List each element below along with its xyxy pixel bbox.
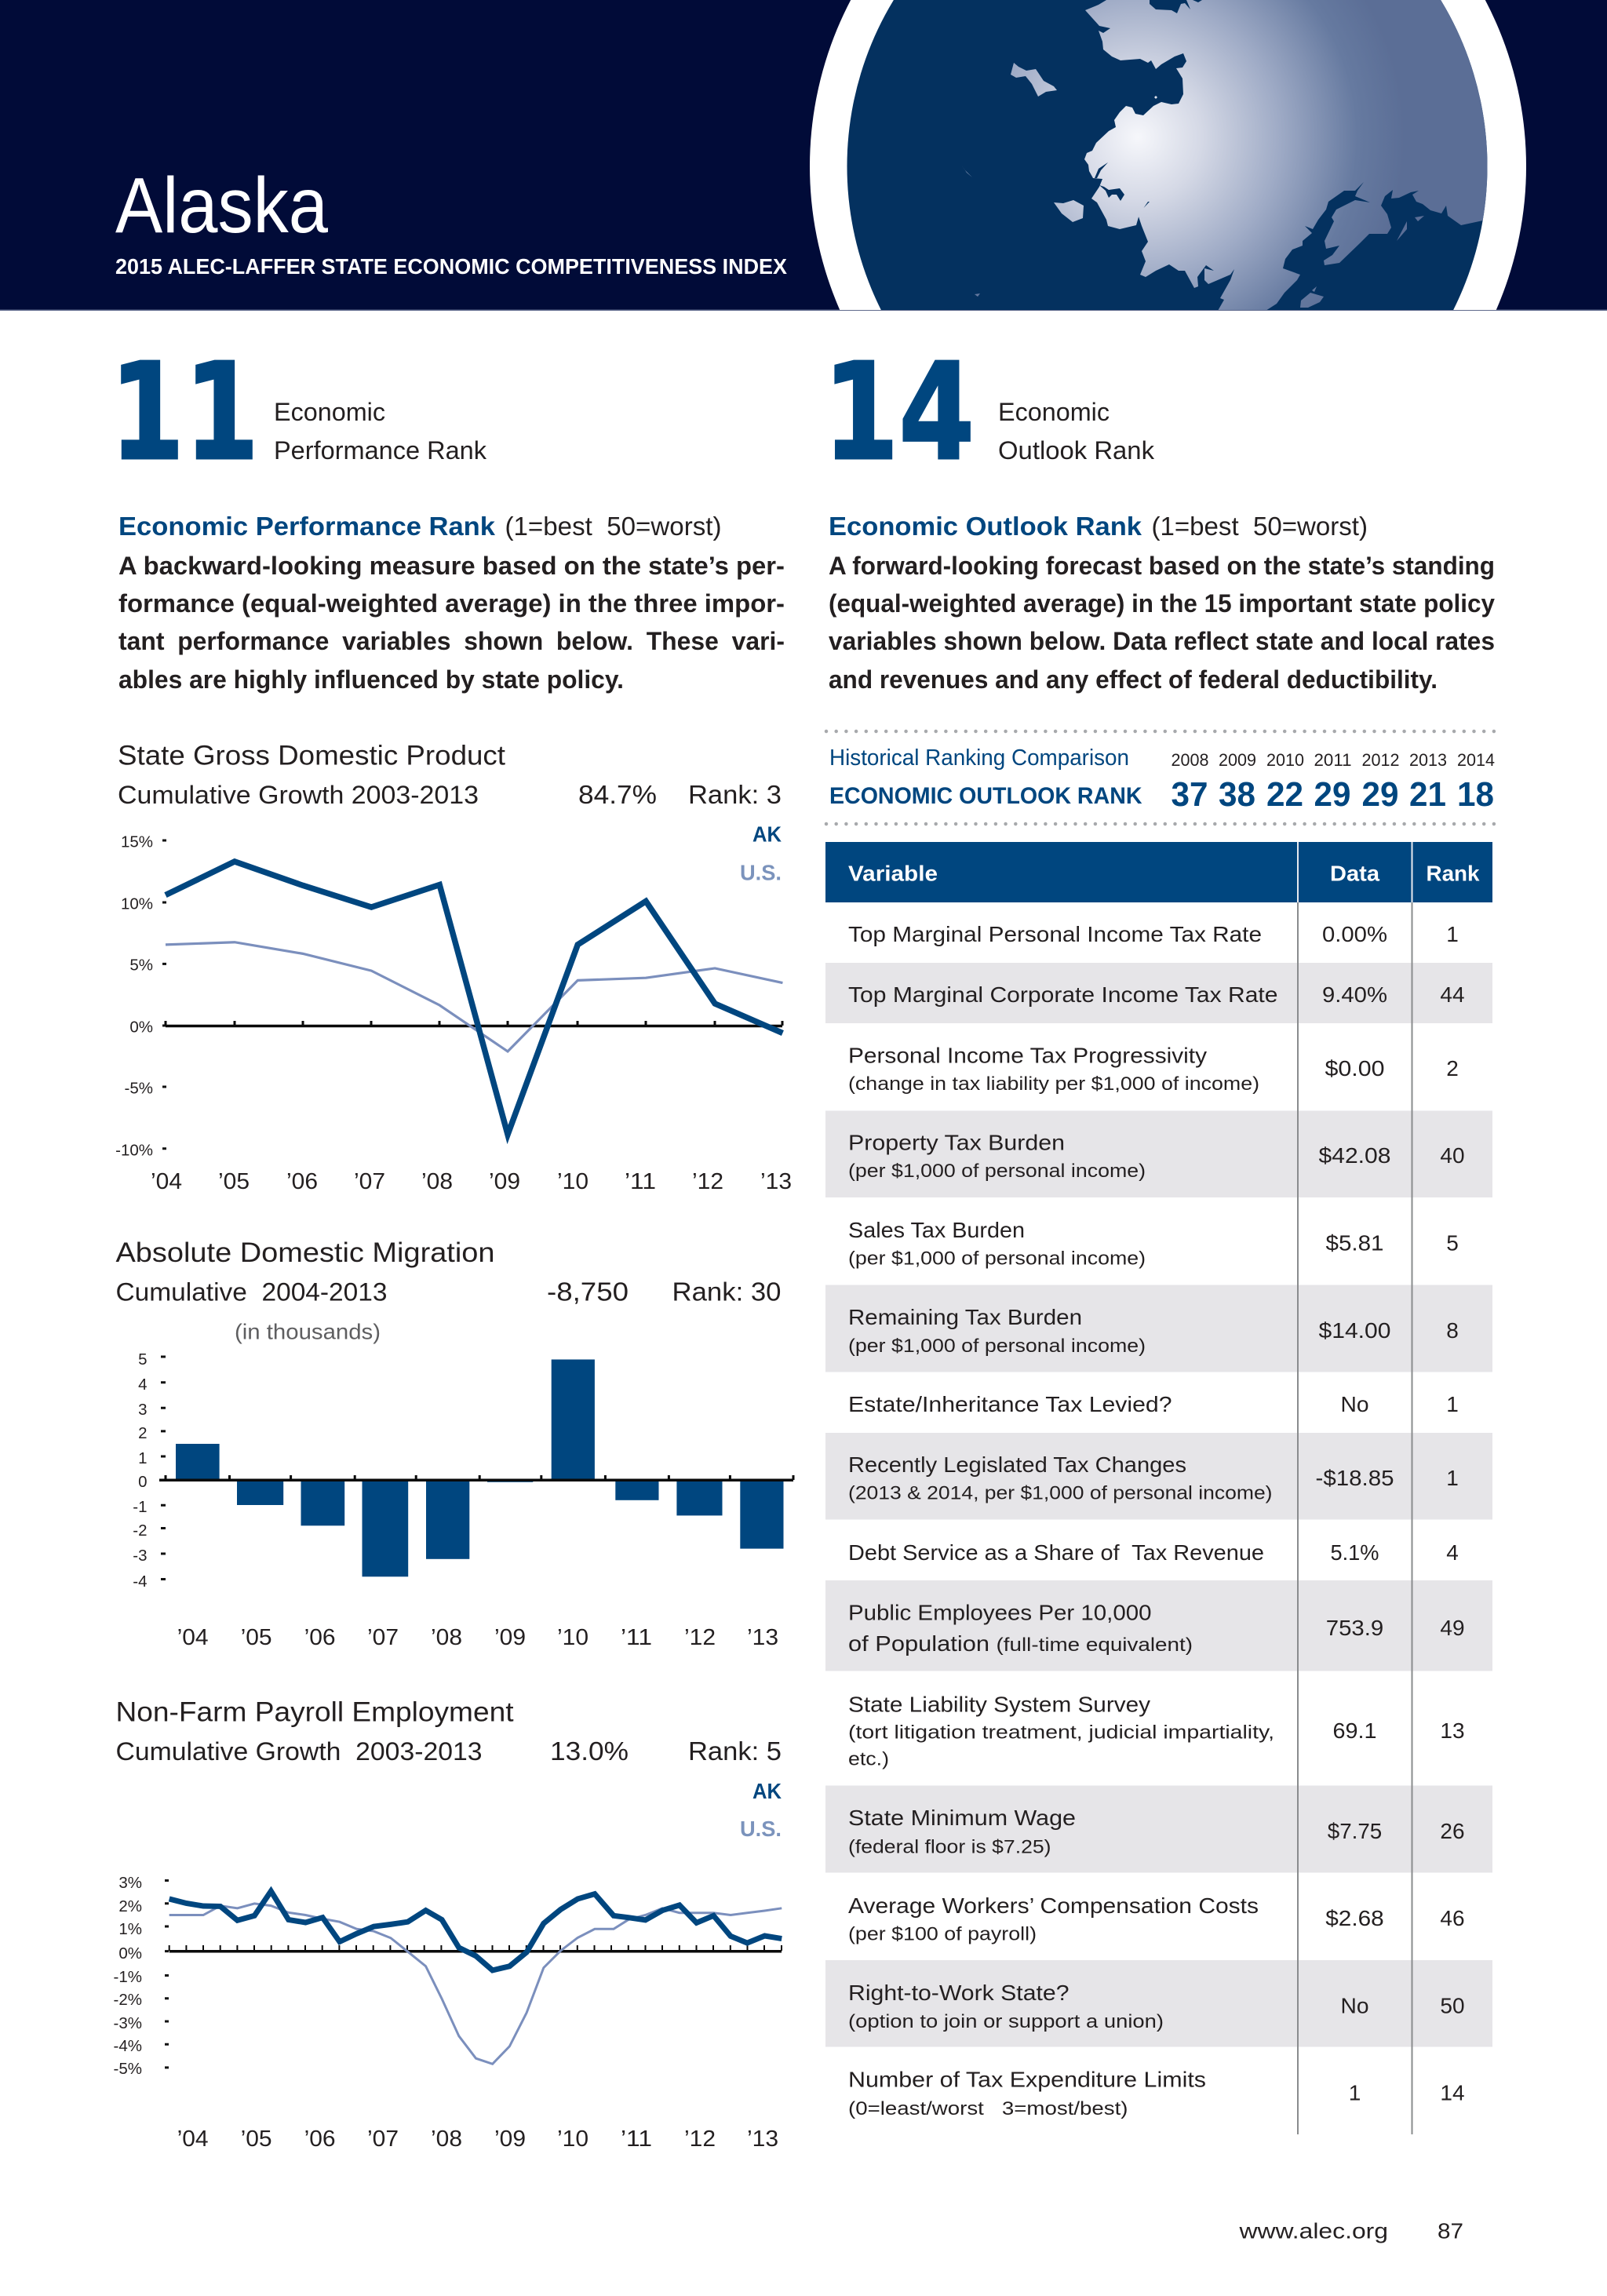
line: AK (169, 1891, 782, 1970)
chart heading: Rank: 5 (688, 1737, 782, 1766)
row: right-to-work state: (option to join or support a union) (848, 2011, 1164, 2032)
row: state liability system survey: 13 (1440, 1718, 1465, 1743)
row: estate or inheritance tax levied (848, 1392, 1459, 1416)
y axis labels and ticks: -2% (114, 1991, 142, 2009)
row: right-to-work state: 50 (1440, 1993, 1465, 2018)
row: estate or inheritance tax levied: Estate/Inheritance Tax Levied? (848, 1392, 1172, 1416)
table header: Variable (848, 862, 938, 885)
chart heading: Cumulative 2004-2013 (116, 1277, 388, 1306)
historical rank values: 18 (1457, 775, 1494, 814)
row: estate or inheritance tax levied: 1 (1446, 1392, 1459, 1416)
history years (1171, 750, 1495, 770)
row: number of tax expenditure limits: (0=least/worst 3=most/best) (848, 2098, 1128, 2119)
x axis (159, 1475, 793, 1650)
x axis: ’13 (760, 1169, 792, 1194)
row: top marginal personal income tax rate (848, 922, 1459, 946)
table header (825, 842, 1492, 902)
x axis: ’06 (286, 1169, 318, 1194)
row: remaining tax burden: 8 (1446, 1318, 1459, 1343)
row: sales tax burden (848, 1218, 1459, 1270)
chart heading: State Gross Domestic Product (118, 741, 505, 771)
x axis: ’12 (684, 2127, 716, 2152)
row: top marginal personal income tax rate: Top Marginal Personal Income Tax Rate (848, 922, 1262, 946)
row: public employees per 10,000 of population (848, 1601, 1465, 1656)
table header: Data (1330, 862, 1379, 885)
row: recently legislated tax changes (848, 1452, 1459, 1503)
legend (740, 1779, 782, 1841)
row: right-to-work state: No (1340, 1993, 1368, 2018)
row: estate or inheritance tax levied: No (1340, 1392, 1368, 1416)
y axis labels and ticks: -4 (133, 1573, 148, 1591)
row: state minimum wage: $7.75 (1328, 1819, 1382, 1843)
x axis (169, 1945, 782, 2152)
row: recently legislated tax changes: Recently Legislated Tax Changes (848, 1452, 1186, 1477)
chart heading: Cumulative Growth 2003-2013 (116, 1737, 482, 1766)
chart heading: Non-Farm Payroll Employment (116, 1696, 514, 1728)
panel: non-farm payroll employment chart (114, 1696, 782, 2152)
x axis: ’07 (354, 1169, 385, 1194)
chart heading: 84.7% (578, 780, 657, 809)
row: public employees per 10,000 of population: (full-time equivalent) (997, 1635, 1193, 1656)
row: remaining tax burden: Remaining Tax Burden (848, 1305, 1082, 1329)
y axis labels and ticks: -3 (133, 1547, 148, 1565)
rank caption: Performance Rank (274, 436, 487, 465)
row: state liability system survey: (tort litigation treatment, judicial impartiality, (848, 1722, 1274, 1744)
row: average workers compensation costs: (per $100 of payroll) (848, 1924, 1037, 1944)
description text: Economic Outlook Rank (829, 512, 1142, 541)
row: number of tax expenditure limits: 14 (1440, 2081, 1465, 2105)
rank caption: Outlook Rank (998, 436, 1155, 465)
line: U.S. (169, 1904, 782, 2064)
y axis labels and ticks: -2 (133, 1522, 148, 1540)
description text: tant performance variables shown below. These vari- (118, 627, 785, 655)
y axis labels and ticks: -1 (133, 1498, 148, 1516)
y axis labels and ticks: -3% (114, 2014, 142, 2032)
description text: ables are highly influenced by state policy. (118, 665, 624, 694)
description text: A backward-looking measure based on the state’s per- (118, 552, 785, 580)
chart heading: Absolute Domestic Migration (116, 1237, 494, 1268)
row: recently legislated tax changes: -$18.85 (1315, 1466, 1394, 1490)
row: top marginal corporate income tax rate (848, 982, 1465, 1007)
row: sales tax burden: 5 (1446, 1230, 1459, 1256)
history years: 2012 (1362, 750, 1400, 770)
y axis labels and ticks: -1% (114, 1968, 142, 1986)
x axis: ’11 (621, 2127, 652, 2152)
chart heading: -8,750 (547, 1277, 629, 1306)
row: right-to-work state: Right-to-Work State? (848, 1981, 1069, 2005)
y axis labels and ticks: 0% (129, 1019, 153, 1036)
row: sales tax burden: $5.81 (1326, 1230, 1384, 1256)
rank caption: Economic (274, 398, 385, 426)
row: remaining tax burden (848, 1305, 1459, 1357)
footer: www.alec.org (1238, 2219, 1388, 2243)
row: state minimum wage: 26 (1440, 1819, 1465, 1843)
description text: A forward-looking forecast based on the state’s standing (829, 552, 1495, 580)
y axis labels and ticks: 10% (121, 895, 153, 913)
row: right-to-work state (848, 1981, 1465, 2032)
chart heading (116, 1237, 782, 1343)
panel: economic outlook rank (823, 335, 1495, 694)
x axis: ’08 (431, 1625, 462, 1650)
legend: U.S. (740, 860, 782, 885)
row: number of tax expenditure limits (848, 2067, 1465, 2119)
row: remaining tax burden: (per $1,000 of personal income) (848, 1336, 1146, 1357)
row: state minimum wage: (federal floor is $7.25) (848, 1836, 1051, 1858)
row: top marginal personal income tax rate: 1 (1446, 922, 1459, 946)
table row stripes (825, 963, 1492, 2046)
x axis: ’04 (177, 1625, 209, 1650)
legend (740, 822, 782, 885)
row: recently legislated tax changes: 1 (1446, 1466, 1459, 1490)
column dividers (1298, 902, 1412, 2134)
panel: policy variables table (825, 842, 1492, 2134)
y axis labels and ticks: 0 (138, 1473, 148, 1491)
x axis (151, 1021, 792, 1194)
row: recently legislated tax changes: (2013 & 2014, per $1,000 of personal income) (848, 1483, 1273, 1503)
x axis: ’13 (747, 1625, 778, 1650)
historical rank values: 29 (1362, 775, 1398, 814)
row: property tax burden (848, 1130, 1465, 1182)
footer (1238, 2219, 1463, 2243)
row: state liability system survey: State Liability System Survey (848, 1692, 1150, 1717)
subtitle: 2015 ALEC-LAFFER STATE ECONOMIC COMPETITIVENESS INDEX (115, 254, 788, 279)
description text: (equal-weighted average) in the 15 important state policy (829, 589, 1495, 618)
row: average workers compensation costs: 46 (1440, 1906, 1465, 1930)
chart heading: Rank: 3 (688, 780, 782, 809)
y axis labels and ticks: 1 (138, 1449, 148, 1467)
row: property tax burden: (per $1,000 of personal income) (848, 1161, 1146, 1182)
x axis: ’07 (367, 2127, 399, 2152)
x axis: ’07 (367, 1625, 399, 1650)
row: average workers compensation costs (848, 1893, 1465, 1944)
x axis: ’12 (692, 1169, 723, 1194)
x axis: ’09 (489, 1169, 520, 1194)
history years: 2008 (1171, 750, 1208, 770)
x axis: ’06 (304, 1625, 336, 1650)
y axis labels and ticks: 4 (138, 1376, 148, 1394)
x axis: ’10 (557, 1169, 589, 1194)
description text (118, 512, 785, 694)
x axis: ’04 (151, 1169, 182, 1194)
historical rank values: 37 (1171, 775, 1208, 814)
description text: Economic Performance Rank (118, 512, 496, 541)
x axis: ’11 (625, 1169, 656, 1194)
header banner (0, 0, 1607, 311)
row: public employees per 10,000 of population: Public Employees Per 10,000 (848, 1601, 1152, 1624)
row: average workers compensation costs: $2.68 (1325, 1906, 1384, 1930)
row: top marginal personal income tax rate: 0.00% (1322, 922, 1387, 946)
description text: and revenues and any effect of federal deductibility. (829, 665, 1438, 694)
row: top marginal corporate income tax rate: 44 (1440, 982, 1465, 1007)
legend: AK (752, 822, 782, 846)
history years: 2013 (1409, 750, 1447, 770)
x axis: ’10 (557, 2127, 589, 2152)
row: personal income tax progressivity: $0.00 (1325, 1056, 1384, 1081)
chart heading (116, 1696, 782, 1766)
row: debt service as a share of tax revenue: Debt Service as a Share of Tax Revenue (848, 1540, 1264, 1565)
y axis labels and ticks: 1% (118, 1920, 142, 1938)
y axis labels and ticks: 5 (138, 1350, 148, 1368)
x axis: ’08 (421, 1169, 453, 1194)
historical rank values (1171, 775, 1494, 814)
row: property tax burden: Property Tax Burden (848, 1130, 1065, 1155)
row: debt service as a share of tax revenue: 5.1% (1331, 1540, 1379, 1565)
panel: historical ranking comparison (826, 731, 1495, 824)
historical rank values: 22 (1266, 775, 1303, 814)
y axis labels and ticks (133, 1350, 166, 1591)
footer: 87 (1438, 2219, 1463, 2243)
x axis: ’05 (241, 2127, 272, 2152)
row: personal income tax progressivity (848, 1044, 1459, 1095)
description text (829, 512, 1495, 694)
row: state liability system survey: 69.1 (1332, 1718, 1376, 1743)
history heading: Historical Ranking Comparison (829, 745, 1129, 771)
y axis labels and ticks: 2% (118, 1897, 142, 1915)
rank caption (998, 398, 1155, 465)
history years: 2011 (1314, 750, 1351, 770)
line: AK (166, 862, 782, 1135)
row: public employees per 10,000 of population: 49 (1440, 1616, 1465, 1640)
y axis labels and ticks: 3% (118, 1874, 142, 1892)
chart heading: 13.0% (550, 1737, 629, 1766)
x axis: ’08 (431, 2127, 462, 2152)
panel: economic performance rank (110, 335, 785, 694)
x axis: ’12 (684, 1625, 716, 1650)
row: property tax burden: 40 (1440, 1143, 1465, 1168)
row: state minimum wage: State Minimum Wage (848, 1806, 1076, 1830)
row: sales tax burden: Sales Tax Burden (848, 1218, 1025, 1242)
x axis: ’13 (747, 2127, 778, 2152)
x axis: ’09 (494, 2127, 526, 2152)
x axis: ’10 (557, 1625, 589, 1650)
y axis labels and ticks: 0% (118, 1944, 142, 1963)
y axis labels and ticks (114, 1874, 169, 2078)
row: debt service as a share of tax revenue (848, 1540, 1459, 1565)
panel: state gross domestic product chart (115, 741, 792, 1194)
legend: AK (752, 1779, 782, 1803)
chart heading (118, 741, 782, 809)
row: state liability system survey (848, 1692, 1465, 1770)
row: state liability system survey: etc.) (848, 1748, 889, 1770)
historical rank values: 21 (1409, 775, 1446, 814)
description text: (1=best 50=worst) (1152, 512, 1368, 541)
row: remaining tax burden: $14.00 (1318, 1318, 1390, 1343)
y axis labels and ticks: 15% (121, 833, 153, 851)
y axis labels and ticks: -5% (125, 1080, 153, 1097)
x axis: ’09 (494, 1625, 526, 1650)
rank caption: Economic (998, 398, 1110, 426)
x axis: ’05 (241, 1625, 272, 1650)
row: average workers compensation costs: Average Workers’ Compensation Costs (848, 1893, 1259, 1918)
bars (176, 1359, 783, 1576)
row: public employees per 10,000 of population: 753.9 (1326, 1616, 1383, 1640)
chart heading: Rank: 30 (672, 1277, 782, 1306)
row: debt service as a share of tax revenue: 4 (1446, 1540, 1459, 1565)
history years: 2009 (1219, 750, 1256, 770)
history years: 2014 (1457, 750, 1495, 770)
y axis labels and ticks: -5% (114, 2060, 142, 2078)
historical rank values: 29 (1314, 775, 1351, 814)
row: number of tax expenditure limits: 1 (1349, 2081, 1361, 2105)
title: Alaska (115, 162, 328, 250)
historical rank values: 38 (1219, 775, 1255, 814)
description text: formance (equal-weighted average) in the three impor- (118, 589, 785, 618)
legend: U.S. (740, 1817, 782, 1841)
rank label: ECONOMIC OUTLOOK RANK (829, 783, 1142, 809)
description text: variables shown below. Data reflect state and local rates (829, 627, 1495, 655)
history years: 2010 (1266, 750, 1304, 770)
panel: absolute domestic migration chart (116, 1237, 793, 1650)
rank caption (274, 398, 487, 465)
x axis: ’11 (621, 1625, 652, 1650)
row: public employees per 10,000 of population: of Population (848, 1631, 989, 1656)
big rank number 14: 14 (823, 335, 975, 490)
row: top marginal corporate income tax rate: 9.40% (1322, 982, 1387, 1007)
y axis labels and ticks: -10% (115, 1141, 153, 1160)
x axis: ’04 (177, 2127, 209, 2152)
x axis: ’06 (304, 2127, 336, 2152)
line: U.S. (166, 942, 782, 1051)
y axis labels and ticks: 2 (138, 1424, 148, 1442)
big rank number 11: 11 (110, 335, 259, 490)
chart heading: Cumulative Growth 2003-2013 (118, 781, 479, 809)
row: top marginal corporate income tax rate: Top Marginal Corporate Income Tax Rate (848, 982, 1277, 1007)
row: property tax burden: $42.08 (1318, 1143, 1390, 1168)
row: personal income tax progressivity: Personal Income Tax Progressivity (848, 1044, 1207, 1067)
x axis: ’05 (218, 1169, 250, 1194)
row: number of tax expenditure limits: Number of Tax Expenditure Limits (848, 2067, 1206, 2092)
chart heading: (in thousands) (235, 1320, 381, 1343)
y axis labels and ticks: -4% (114, 2037, 142, 2055)
row: state minimum wage (848, 1806, 1465, 1858)
icon: globe with map of Alaska (810, 0, 1526, 310)
description text: (1=best 50=worst) (505, 512, 722, 541)
y axis labels and ticks: 3 (138, 1401, 148, 1419)
row: sales tax burden: (per $1,000 of personal income) (848, 1248, 1146, 1270)
row: personal income tax progressivity: (change in tax liability per $1,000 of income) (848, 1073, 1259, 1095)
y axis labels and ticks: 5% (129, 956, 153, 975)
table header: Rank (1427, 862, 1480, 885)
y axis labels and ticks (115, 833, 166, 1160)
row: personal income tax progressivity: 2 (1446, 1056, 1459, 1081)
